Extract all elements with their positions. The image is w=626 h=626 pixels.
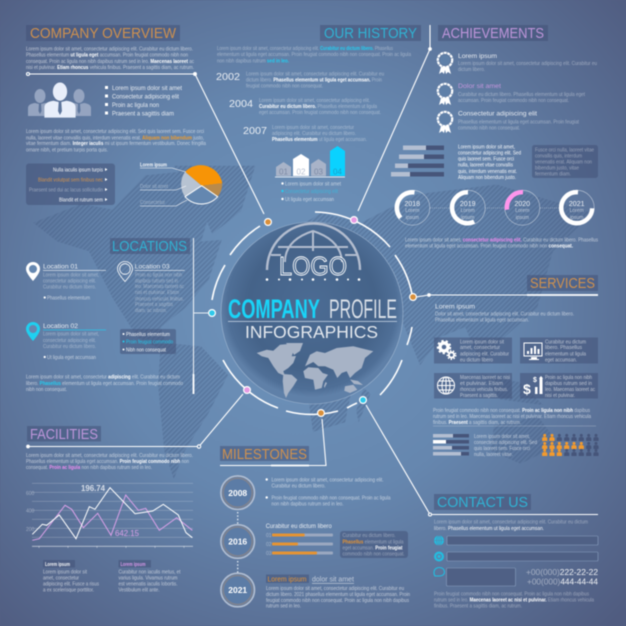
timeline 2007: Lorem ipsum dolor sit amet, consectetur [272,125,354,131]
section: achievements [391,25,598,250]
house bar chart: 01 [279,168,288,176]
card: gears: adipiscing elit. Curabitur [460,352,509,358]
body text: vitae fermentum diam. Integer iaculis mi ut ipsum fermentum vestibulum. Donec fringilla [26,141,206,147]
card: globe: et pulvinar. Etiam [460,381,503,387]
section: facilities [26,426,193,594]
intro [435,304,574,324]
subheading [266,574,354,584]
intro text [26,46,194,71]
subheading: Lorem ipsum [268,576,307,584]
intro: Dolor sit amet, consectetur adipiscing elit. Curabitur eu dictum libero. [435,312,574,318]
ring 2019: 2019 [460,201,476,208]
logo globe [267,224,360,270]
company profile title [228,294,397,342]
icon: at sign [434,552,444,562]
text block: Aliquam non bibendum justo. [458,175,516,181]
field: website [447,536,598,545]
intro text: elementum ut ligula eget accumsan. Proin feugiat commodo nibh non consequat. Proin ac ligula [217,52,411,58]
footer text: rutrum sed in leo. Maecenas laoreet ac nisi et pulvinar. Etiam rhoncus vehicula [434,597,594,603]
caption text: libero. Phasellus elementum ut ligula eget accumsan. Proin feugiat commodo [26,381,183,387]
footer text: Proin feugiat commodo nibh non consequat. Proin ac ligula non nibh dapibus [434,592,589,598]
timeline 2002: dictum libero. Phasellus elementum ut ligula eget accumsan. Proin [246,78,382,84]
pie chart [140,162,222,206]
card: money: $ [533,377,537,384]
panel: note: Curabitur eu dictum libero. [342,533,396,539]
note 1 [43,560,99,594]
achievement 1 [438,53,597,74]
ring 2018: Lorem [405,208,419,214]
location 03: Location 03 [135,264,170,270]
location 02: Curabitur eu dictum libero. [43,344,96,350]
intro text: consequat. Proin ac ligula non nibh dapibus rutrum sed in leo. Maecenas laoreet ac [26,59,194,65]
logo dots [266,278,360,281]
card: chart monitor: elementum ut ligula [545,352,586,358]
body text: Lorem ipsum dolor sit amet, consectetur adipiscing elit. Sed quis laoreet sem. Fusce orci [26,129,204,135]
bullet list: Consectetur adipiscing elit [112,94,179,100]
panel: menu list: Praesent sed dui ac lacus sollicitudin [29,188,103,194]
achievement 1: Lorem ipsum [458,53,497,60]
panel: note [532,145,598,178]
note 2: Lorem ipsum [120,562,146,568]
card: chart monitor: eget accumsan. [545,358,577,364]
chart legend: Lorem ipsum dolor sit amet [285,182,342,188]
house bar chart: 04 [333,168,342,176]
ring 2020: Lorem [515,208,529,214]
section: our history [216,25,421,203]
achievement 2: accumsan. Proin feugiat commodo nibh non consequat. [458,98,569,104]
panel: menu list: Blandit volutpat sem finibus nec [38,178,103,184]
text block: consectetur adipiscing elit. Sed [458,151,521,157]
intro: Phasellus elementum ut ligula eget accumsan. [435,318,529,324]
timeline 2007: adipiscing elit. Curabitur eu dictum libero. [272,131,356,137]
paragraph: dictum libero. 2021 phasellus elementum ut ligula eget accumsan. Proin [266,592,410,598]
panel: note: fermentum diam. [535,172,571,178]
intro: Lorem ipsum [435,304,475,310]
progress bars [433,434,469,456]
location 01: Location 01 [43,264,78,270]
location 01: Lorem ipsum dolor sit amet, [43,272,99,278]
timeline 2004: 2004 [229,99,253,110]
inner disc [221,222,403,404]
ring 2021: Lorem [570,208,584,214]
achievement 2 [438,83,586,105]
location 01: Phasellus elementum [47,296,90,302]
footer text: finibus. Praesent a sagittis diam, ac rutrum. [434,603,522,609]
achievement 3: Phasellus elementum ut ligula eget accumsan. Proin feugiat [458,120,580,126]
intro: Phasellus elementum ut ligula eget accumsan. Proin feugiat commodo nibh non [26,459,189,465]
location 01: consectetur adipiscing elit. [43,278,96,284]
heading: COMPANY OVERVIEW [30,26,176,42]
timeline dots [237,512,239,573]
ring 2021: 2021 [569,201,585,208]
world map [257,343,373,398]
note 1: amet, consectetur [43,576,79,582]
line chart: 200 [26,527,35,533]
panel: menu list [26,164,115,205]
milestone bullets: Proin feugiat commodo nibh non consequat. Proin ac ligula [272,496,391,502]
card: globe: Maecenas laoreet ac nisi [460,375,510,381]
intro [434,520,588,532]
footer text [434,592,594,609]
heading: FACILITIES [30,427,98,443]
timeline 2002: 2002 [216,72,240,83]
caption text: nibh non consequat. [26,387,67,393]
ring 2018: 2018 [405,201,420,208]
note 2: Curabitur non iaculis metus, et [118,570,181,576]
card: chart monitor [520,338,598,364]
ring 2018: ipsum [406,215,419,221]
card: chart monitor: Curabitur eu dictum [545,340,586,346]
caption text [26,374,183,393]
intro text: Phasellus elementum ut ligula eget accumsan. Proin feugiat commodo nibh non [26,52,188,58]
heading: ACHIEVEMENTS [442,26,544,42]
card: gears [434,338,512,364]
section: contact us [434,494,598,609]
line chart: 600 [26,491,35,497]
body text: finibus. Praesent a sagittis diam, ac rutrum. [433,420,521,426]
caption text: Lorem ipsum dolor sit amet, consectetur adipiscing elit. Curabitur eu dictum libero. Phasellus [405,238,598,244]
bullet list: Lorem ipsum dolor sit amet [112,85,182,92]
note 1: Lorem ipsum dolor sit [43,570,88,576]
intro [26,453,193,471]
timeline 2002: Lorem ipsum dolor sit amet, consectetur adipiscing elit. Curabitur eu [246,72,384,78]
phone numbers: +00(000)444-44-44 [527,576,598,586]
achievement 1: dictum libero. [458,67,485,73]
progress bars [266,523,333,557]
location 02 [26,322,106,361]
text block: quis, interdum venenatis erat. [458,169,517,175]
text block: nulla, laoreet vitae convallis [458,163,513,169]
central circle [209,212,416,416]
chart legend: Consectetur adipiscing elit [285,189,339,195]
intro: libero. Phasellus elementum ut ligula eget accumsan. [434,526,544,532]
pie labels: Lorem ipsum [140,162,167,168]
timeline 2004: Curabitur eu dictum libero. Phasellus elementum ut ligula [259,104,377,110]
card: money: dapibus rutrum sed in [545,381,592,387]
heading: MILESTONES [222,447,307,463]
company profile title: PROFILE [329,294,397,324]
panel: note: venenatis erat. Aliquam non [535,160,592,166]
icon: globe [434,536,444,546]
section: locations [26,238,190,393]
timeline 2004 [229,98,381,116]
ring 2019 [450,190,485,225]
body text [433,408,596,426]
caption text: elementum ut ligula eget accumsan. Proin feugiat commodo nibh non consequat. [405,244,574,250]
panel: menu list: Blandit et rutrum sem [59,198,103,204]
note 2: est venenatis iaculis lobortis. [118,582,178,588]
heading: CONTACT US [437,495,528,511]
panel: note [340,531,408,558]
house bar chart [275,146,345,178]
subheading: dolor sit amet [312,576,354,584]
card: money: Proin ac ligula non nibh [545,375,592,381]
panel: note: bibendum justo, vitae [535,166,579,172]
paragraph: feugiat commodo nibh non consequat. Proin ac ligula non nibh dapibus [266,598,409,604]
progress bars: 01 [266,533,272,539]
location 03: nisi et pulvinar. Etiam [135,290,179,296]
text block [458,145,521,181]
body text: rutrum sed in leo. Maecenas laoreet ac nisi et pulvinar. Etiam rhoncus vehicula [433,414,591,420]
note 2 [118,560,181,594]
line chart: 196.74 [81,484,106,493]
heading: OUR HISTORY [324,26,417,42]
body text: ornare nibh, et pretium turpis porta quis. [26,148,108,154]
section: milestones [220,446,410,610]
paragraph: rutrum sed in leo. [266,604,301,610]
card: globe: rhoncus vehicula finibus. [460,387,508,393]
connector lines and nodes [26,25,598,516]
achievement 2: Dolor sit amet [458,83,501,90]
bullet list: Proin ac ligula non [112,102,159,109]
text block: Lorem ipsum dolor sit amet, [458,145,515,151]
milestone bullets: Curabitur eu dictum libero. [272,484,326,490]
intro: consequat. Proin ac ligula non nibh dapibus rutrum sed in leo. [26,465,152,471]
paragraph: Lorem ipsum dolor sit amet, consectetur adipiscing elit. Curabitur eu [266,586,404,592]
location 03: diam, ac rutrum. [135,308,167,314]
line chart [26,483,193,548]
panel: note: eget accumsan. Proin feugiat [342,546,403,552]
logo text: LOGO [279,251,347,281]
phone numbers [526,567,598,586]
intro text: nisi et pulvinar. Etiam rhoncus vehicula finibus. Praesent a sagittis diam, ac rutrum. [26,65,194,71]
card: chart monitor: libero. Phasellus [545,345,583,351]
card: gears: amet, consectetur [460,345,500,351]
body text: nulla, laoreet vitae convallis quis, interdum venenatis erat. Aliquam non bibendum justo, [26,136,204,142]
bars caption [474,434,537,458]
chart legend: Ut ligula eget accumsan [285,197,334,203]
bullet list [105,85,182,118]
paragraph [266,586,410,610]
location 03: leo. Maecenas laoreet ac [135,284,184,290]
people pictogram [542,434,599,456]
ring 2020 [505,190,540,225]
panel: location list: Proin feugiat commodo [126,340,173,346]
section: services [433,275,599,458]
card: money [520,373,598,399]
location 03: Praesent a sagittis [135,302,173,308]
note 1: Lorem ipsum [45,562,70,568]
year 2016: 2016 [228,537,247,547]
caption text: Lorem ipsum dolor sit amet, consectetur adipiscing elit. Curabitur eu dictum [26,374,180,380]
note 1: a ex scelerisque porttitor. [43,588,94,594]
location 01 [26,262,106,302]
card: money: $ [523,381,531,397]
caption text [405,238,598,250]
bars caption: consectetur adipiscing elit. Sed [474,440,537,446]
card: gears: Lorem ipsum dolor sit [460,340,505,346]
panel: location list: Nibh non consequat [126,348,167,354]
section: company overview [26,25,222,206]
note 2: varius ligula. Vivamus rutrum [118,576,178,582]
phone numbers: +00(000)222-22-22 [526,567,598,577]
year 2021 [221,573,254,607]
striped world map background [36,166,588,478]
house bar chart: 03 [314,168,323,176]
year 2021: 2021 [228,585,247,595]
location 03: Proin ac ligula non nibh [135,272,182,278]
icon: team [28,82,91,118]
panel: note: Fusce orci nulla, laoreet vitae [535,148,594,154]
timeline 2004: Lorem ipsum dolor sit amet, consectetur adipiscing elit. [259,98,370,104]
intro: Lorem ipsum dolor sit amet, consectetur adipiscing elit. Curabitur eu dictum [434,520,588,526]
panel: note: Phasellus elementum ut ligula [342,540,404,546]
progress bars [391,146,444,176]
intro text: Lorem ipsum dolor sit amet, consectetur adipiscing elit. Curabitur eu dictum libero. Phasellus [217,46,393,52]
card: gears: eu dictum libero [460,358,493,364]
card: globe: Praesent a sagittis. [460,393,498,399]
location 03: rhoncus vehicula finibus. [135,296,184,302]
location 02: Lorem ipsum dolor sit amet, [43,332,99,338]
milestone bullets: non nibh dapibus rutrum sed in leo. [272,502,344,508]
pie chart: Dolor sit amet [140,184,169,190]
progress bars: 02 [266,542,272,548]
card: money: leo. Maecenas laoreet ac [545,387,595,393]
milestone bullets: Lorem ipsum dolor sit amet, consectetur adipiscing elit. [272,478,384,484]
achievement 3: Consectetur adipiscing elit [458,110,537,118]
timeline 2002: feugiat commodo nibh non consequat. [246,84,323,90]
card: money: nisi et pulvinar. [545,393,575,399]
pie chart: Consectetur [140,200,165,206]
location 02: Location 02 [43,323,78,330]
bars caption: nulla, laoreet vitae. [474,452,513,458]
bars caption: Lorem ipsum dolor sit amet, [474,434,530,440]
body text [26,129,206,154]
ring timeline [395,190,594,225]
ring 2019: ipsum [461,215,474,221]
card: globe [434,373,512,399]
heading: SERVICES [530,276,595,292]
year 2008: 2008 [228,488,247,498]
location 03 [118,262,185,314]
ring 2021: ipsum [570,215,583,221]
line chart: 400 [26,508,35,514]
body text: Proin feugiat commodo nibh non consequat. Proin ac ligula non nibh dapibus [433,408,590,414]
field: message [446,568,516,586]
intro text: Lorem ipsum dolor sit amet, consectetur adipiscing elit. Curabitur eu dictum libero. [26,46,193,52]
location 03: dapibus rutrum sed in [135,278,178,284]
achievement 3: commodo nibh non consequat. [458,126,520,132]
heading: LOCATIONS [112,239,187,255]
panel: location list [120,329,176,354]
text block: quis laoreet sem. Fusce orci [458,157,514,163]
year 2016 [221,525,254,558]
panel: location list: Phasellus elementum [126,332,170,338]
achievement 3 [438,110,580,133]
house bar chart: 02 [296,168,306,176]
bullet list: Praesent a sagittis diam [112,110,174,118]
chart legend [281,182,342,203]
location 02: consectetur adipiscing elit. [43,338,96,344]
timeline 2007: Phasellus elementum ut ligula eget accumsan. [272,137,367,143]
year 2008 [221,476,254,510]
ring 2021 [559,190,594,225]
ring 2020: ipsum [516,215,529,221]
intro: Lorem ipsum dolor sit amet, consectetur adipiscing elit. Curabitur eu dictum libero. [26,453,193,459]
line chart: 642.15 [115,529,140,538]
panel: note: convallis quis, interdum [535,154,582,160]
ring 2019: Lorem [461,208,475,214]
ring 2018 [395,190,430,225]
panel: menu list: Nulla iaculis ipsum turpis [53,168,103,174]
timeline 2002 [216,72,384,90]
achievement 1: Lorem ipsum dolor sit amet, consectetur adipiscing elit. Curabitur eu [458,61,597,67]
intro text [217,46,411,64]
note 2: Vestibulum elit ante. [118,588,160,594]
timeline 2007: 2007 [243,126,267,137]
ring nodes [209,217,416,416]
progress bars: 03 [266,551,272,557]
bars caption: quis laoreet sem. Fusce orci [474,446,530,452]
location 01: Curabitur eu dictum libero. [43,285,96,291]
icon: speech bubble [434,568,444,576]
company profile title: COMPANY [228,294,320,324]
progress bars: Curabitur eu dictum libero [266,523,332,530]
intro text: non nibh dapibus rutrum sed in leo. [217,58,290,64]
company profile title: INFOGRAPHICS [245,322,378,342]
ring segments [212,212,413,414]
timeline 2007 [243,125,367,143]
milestone bullets [266,478,391,508]
panel: note: commodo nibh non consequat. [342,552,404,558]
ring 2020: 2020 [515,201,530,208]
field: email [447,552,598,561]
timeline 2004: eget accumsan. Proin feugiat commodo nibh non consequat. [259,110,381,116]
note 1: adipiscing elit. Fusce a risus [43,582,99,588]
achievement 2: Curabitur eu dictum libero. Phasellus elementum ut ligula eget [458,92,586,98]
location 02: Ut ligula eget accumsan [47,355,96,361]
